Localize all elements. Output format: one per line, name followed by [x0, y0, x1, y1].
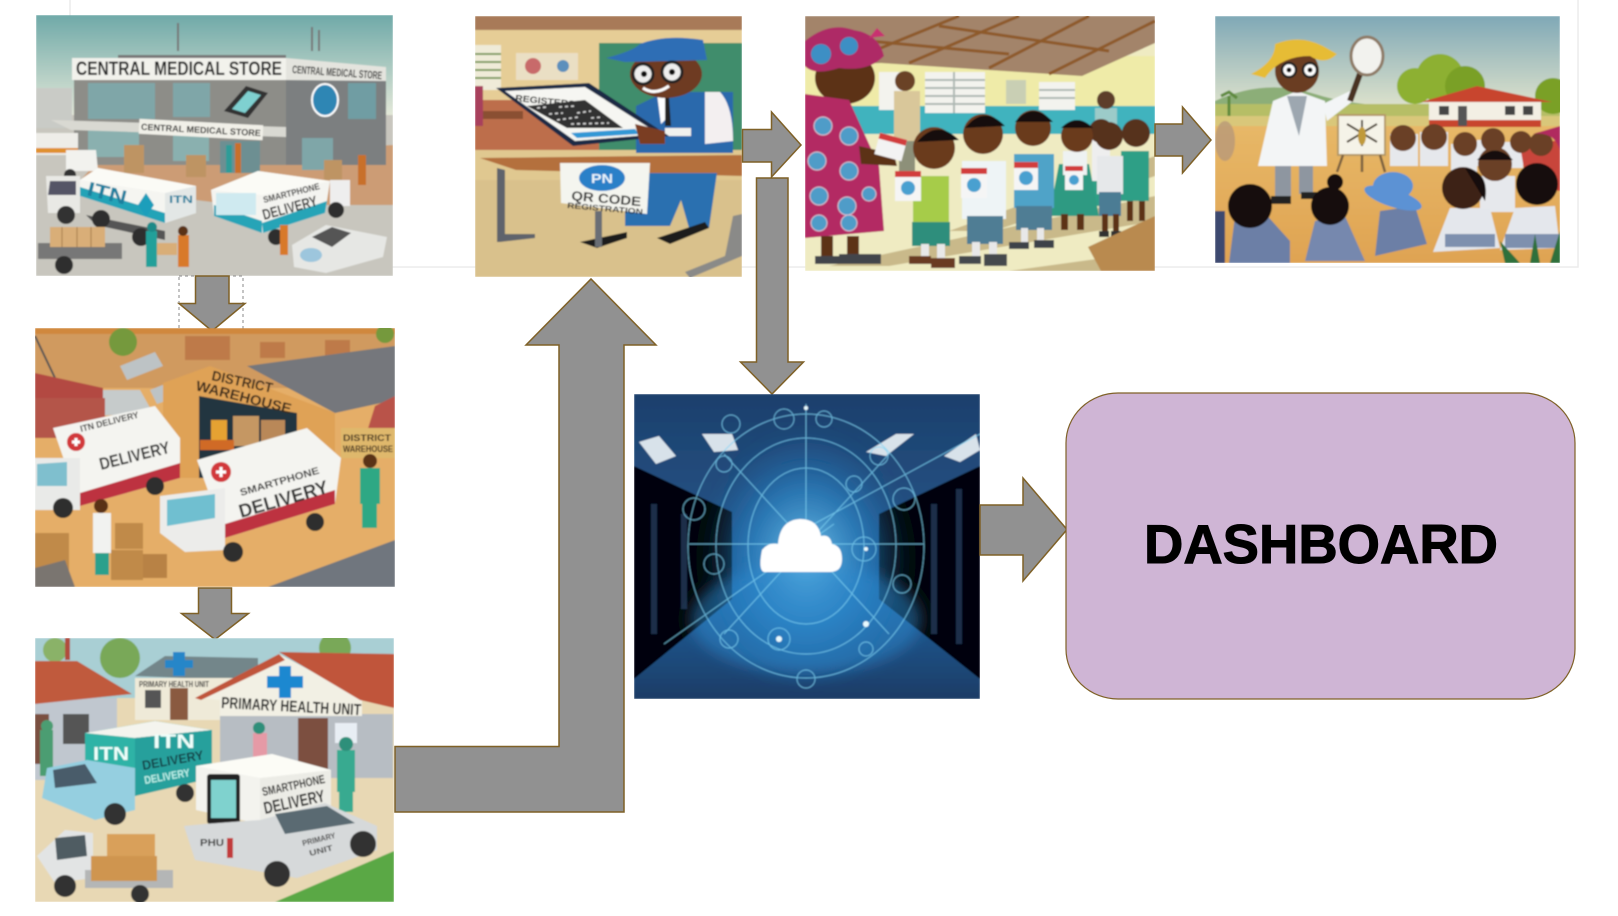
arrow: store to warehouse [179, 276, 245, 331]
illustration: district warehouse: DISTRICT [343, 433, 392, 443]
illustration: primary health unit: PHU [200, 838, 224, 849]
illustration: central medical store: CENTRAL MEDICAL STORE [292, 64, 382, 82]
illustration: primary health unit: PRIMARY HEALTH UNIT [139, 680, 209, 689]
illustration: cloud data platform [634, 394, 980, 699]
illustration: primary health unit: PRIMARY [301, 831, 337, 848]
illustration: central medical store: CENTRAL MEDICAL STORE [76, 59, 282, 80]
illustration: central medical store: SMARTPHONE [262, 181, 321, 205]
illustration: primary health unit: PRIMARY HEALTH UNIT [221, 695, 362, 719]
illustration: district warehouse [35, 325, 395, 587]
illustration: QR code registration: PN [591, 171, 613, 186]
illustration: district warehouse: WAREHOUSE [343, 444, 393, 454]
illustration: central medical store [36, 15, 393, 276]
kids in line [895, 110, 1150, 268]
illustration: QR code registration [475, 16, 742, 278]
arrow: registration to school distribution [742, 112, 801, 177]
arrow: warehouse to health unit [182, 588, 248, 640]
illustration: QR code registration: QR CODE [571, 188, 642, 209]
icon: cloud [760, 519, 842, 572]
illustration: primary health unit: DELIVERY [141, 747, 205, 773]
illustration: district warehouse: ITN DELIVERY [79, 410, 140, 434]
illustration: district warehouse: SMARTPHONE [239, 466, 321, 499]
illustration: district warehouse: WAREHOUSE [194, 377, 293, 417]
illustration: primary health unit: ITN [93, 744, 129, 764]
illustration: district warehouse: DELIVERY [237, 477, 331, 523]
illustration: central medical store: CENTRAL MEDICAL STORE [141, 122, 261, 138]
illustration: district warehouse: DELIVERY [97, 438, 172, 474]
illustration: central medical store: ITN [85, 179, 129, 210]
illustration: primary health unit: DELIVERY [143, 767, 191, 787]
illustration: central medical store: DELIVERY [261, 193, 319, 224]
illustration: primary health unit: ITN [153, 732, 195, 753]
arrow: school distribution to education [1155, 107, 1211, 173]
illustration: central medical store: ITN [169, 194, 193, 206]
arrow: health unit up to registration [395, 279, 656, 812]
arrow: registration down to cloud [740, 178, 804, 394]
background card outline [70, 0, 1578, 267]
illustration: primary health unit: SMARTPHONE [261, 772, 326, 799]
dashboard label: DASHBOARD [1144, 513, 1498, 575]
illustration: malaria education session [1215, 16, 1571, 263]
illustration: primary health unit: DELIVERY [262, 786, 327, 818]
illustration: district warehouse: DISTRICT [210, 367, 275, 396]
illustration: primary health unit: UNIT [308, 843, 334, 858]
dashboard panel [1066, 393, 1575, 699]
seated children front row [1215, 163, 1560, 263]
arrow: cloud to dashboard [980, 478, 1067, 581]
illustration: QR code registration: REGISTERS [515, 93, 576, 109]
illustration: school net distribution [805, 16, 1155, 271]
illustration: primary health unit [35, 632, 394, 903]
illustration: QR code registration: REGISTRATION [567, 201, 644, 217]
seated children back row [1390, 124, 1560, 212]
